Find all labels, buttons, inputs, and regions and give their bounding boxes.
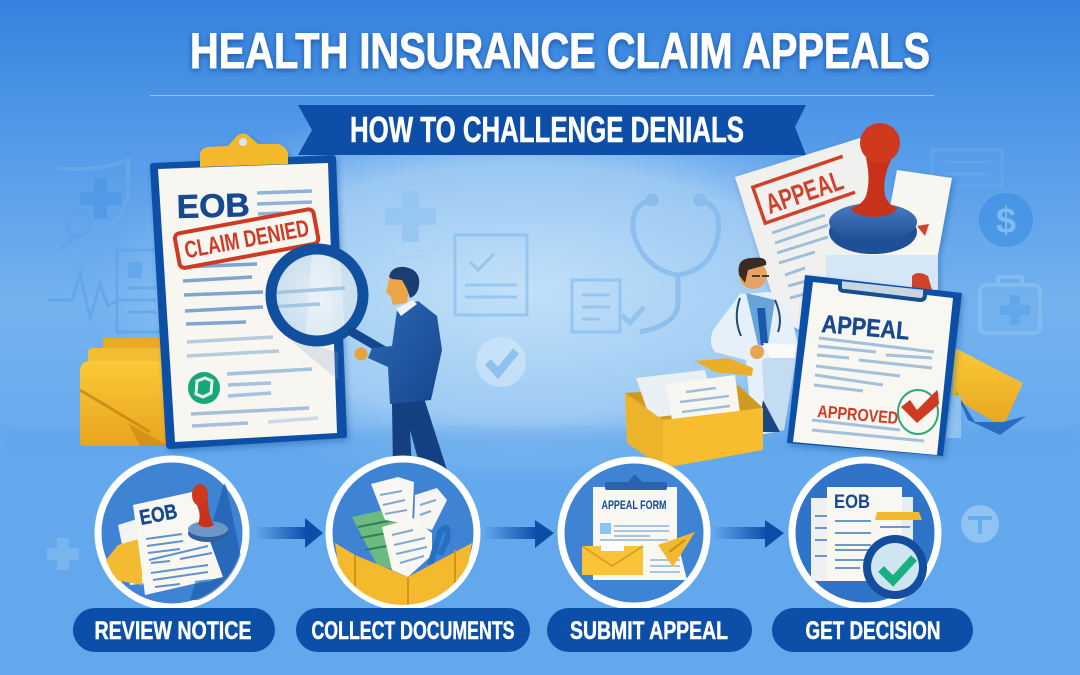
panel: approved appeal scene bbox=[625, 123, 1026, 468]
arrow 1 bbox=[255, 518, 323, 548]
subtitle ribbon: HOW TO CHALLENGE DENIALS bbox=[350, 109, 744, 150]
icon: faint document left bbox=[117, 250, 163, 332]
circle illustration bbox=[335, 477, 472, 610]
icon: green badge bbox=[188, 372, 220, 404]
step circle bbox=[98, 459, 246, 607]
magnifying glass bbox=[270, 249, 383, 380]
clipboard clip bbox=[840, 281, 925, 300]
document box bbox=[625, 370, 763, 468]
faint background icons bbox=[47, 150, 1040, 570]
icon: stethoscope bbox=[633, 196, 719, 332]
doc text lines bbox=[182, 191, 318, 426]
appeal red stamp text: APPEAL bbox=[761, 165, 847, 220]
step label: get decision: GET DECISION bbox=[806, 617, 940, 645]
icon: document with check bbox=[455, 235, 527, 315]
circle illustration: EOB bbox=[834, 492, 870, 513]
arrow 2 bbox=[483, 520, 554, 548]
paper lines bbox=[812, 338, 934, 441]
appeal red stamp text bbox=[753, 156, 855, 223]
yellow envelope bbox=[946, 348, 1026, 438]
icon: faint mark lower right bbox=[961, 505, 999, 543]
man in suit bbox=[354, 267, 447, 470]
icon: medkit bbox=[980, 277, 1040, 333]
step circle bbox=[561, 460, 707, 606]
icon: dollar circle: $ bbox=[996, 200, 1016, 241]
icon: heartbeat line bbox=[48, 274, 132, 318]
step 1: review notice bbox=[98, 459, 250, 607]
rubber stamp bbox=[829, 123, 932, 290]
icon: document with checkmark bbox=[572, 280, 644, 332]
yellow folder in box bbox=[695, 358, 753, 376]
icon: faint form top right bbox=[932, 150, 1002, 186]
subtitle ribbon bbox=[298, 105, 806, 155]
approved text: APPROVED bbox=[817, 401, 899, 428]
step label: review notice bbox=[73, 608, 275, 652]
step label: collect documents: COLLECT DOCUMENTS bbox=[312, 617, 514, 645]
circle illustration bbox=[811, 487, 922, 581]
step 4: get decision bbox=[792, 460, 938, 606]
doctor bbox=[711, 258, 798, 434]
doc heading EOB: EOB bbox=[176, 186, 250, 225]
step 2: collect documents bbox=[329, 459, 477, 610]
circle illustration: APPEAL FORM bbox=[602, 500, 666, 512]
icon: faint plus lower left bbox=[47, 538, 79, 570]
circle illustration: EOB bbox=[138, 500, 179, 530]
clipboard with EOB bbox=[150, 134, 347, 449]
back paper with appeal stamp bbox=[735, 138, 952, 330]
icon: shield with plus bbox=[58, 160, 128, 252]
icon: dollar circle bbox=[979, 193, 1033, 247]
step 3: submit appeal bbox=[561, 460, 707, 606]
step label: review notice: REVIEW NOTICE bbox=[94, 617, 252, 645]
step circle bbox=[792, 460, 938, 606]
icon: yellow folders bbox=[80, 338, 168, 446]
approved clipboard bbox=[787, 275, 962, 456]
step circle bbox=[329, 459, 477, 607]
back paper lines bbox=[772, 215, 828, 298]
icon: plus with stethoscope arc bbox=[373, 191, 447, 258]
heading APPEAL: APPEAL bbox=[820, 310, 911, 346]
step label: get decision bbox=[772, 608, 973, 652]
step label: collect documents bbox=[296, 608, 530, 652]
step label: submit appeal: SUBMIT APPEAL bbox=[570, 617, 728, 645]
clipboard clip bbox=[200, 134, 288, 167]
icon: check circle bbox=[476, 337, 526, 387]
claim denied stamp: CLAIM DENIED bbox=[182, 215, 311, 264]
step label: submit appeal bbox=[547, 608, 752, 652]
claim denied stamp bbox=[174, 209, 319, 269]
arrow 3 bbox=[712, 520, 784, 548]
circle illustration bbox=[106, 480, 250, 600]
circle illustration bbox=[582, 474, 695, 580]
decision badge bbox=[863, 535, 927, 599]
panel: denied claim scene bbox=[80, 134, 447, 470]
icon: red check seal bbox=[898, 390, 939, 434]
divider bbox=[150, 95, 934, 96]
